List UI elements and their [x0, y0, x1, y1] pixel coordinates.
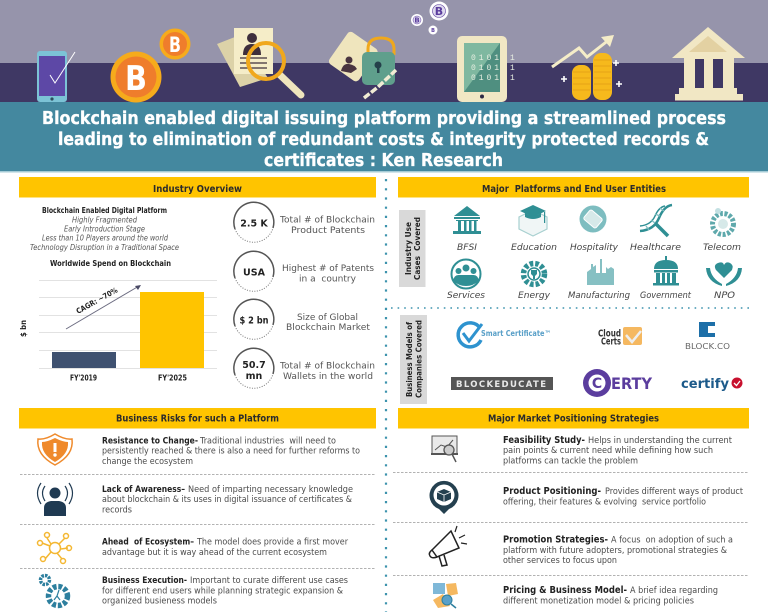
bar chart: worldwide spend: FY'2025 [158, 374, 187, 382]
icon: warning shield [38, 434, 72, 465]
strategy: pricing and business model: Pricing & Business Model- [503, 585, 627, 596]
stat: country: Highest # of Patents [282, 264, 374, 274]
icon: services [452, 260, 480, 288]
label: education: Education [511, 243, 557, 253]
panel: industry overview [19, 177, 376, 388]
icon: network hub [38, 532, 72, 564]
side label: business models: Companies Covered [414, 320, 424, 398]
heading: major platforms [398, 177, 749, 198]
icon: tablet with binary digits: 1 [510, 74, 515, 83]
text block: platform characteristics: Blockchain Enabled Digital Platform [42, 206, 167, 215]
risk: ahead of ecosystem: Ahead of Ecosystem– [102, 538, 194, 548]
strategy: product positioning [503, 486, 744, 508]
strategy: feasibility study: Helps in understanding the current [588, 436, 733, 446]
stat: wallets: Total # of Blockchain [279, 362, 375, 372]
bar chart: worldwide spend [19, 259, 217, 382]
icon: tablet with binary digits: 0101 [471, 64, 499, 73]
heading: business risks [19, 408, 376, 428]
label: manufacturing: Manufacturing [568, 291, 630, 301]
header banner [0, 0, 768, 172]
icon: tablet with binary digits: 0101 [471, 54, 499, 63]
stat: country: in a country [299, 274, 357, 284]
side label: industry use cases: Cases Covered [413, 217, 422, 280]
logo: Blockeducate: BLOCKEDUCATE [456, 380, 546, 390]
label: BFSI: BFSI [457, 243, 477, 253]
label: healthcare: Healthcare [630, 243, 681, 253]
label: energy: Energy [518, 291, 551, 301]
icon: id card, lock and chain [327, 30, 396, 98]
side label: business models: Business Models of [405, 322, 414, 397]
icon: megaphone [429, 526, 467, 566]
side label: business models [400, 315, 427, 404]
icon: energy [524, 264, 544, 284]
risk: business execution: Important to curate different use cases [190, 576, 349, 586]
icon: gears with runner [40, 576, 68, 606]
panel: business risks [19, 408, 376, 606]
icon: bitcoin large: B [125, 59, 147, 99]
logo: Blockeducate [451, 377, 553, 390]
logo: Cloud Certs: Certs [601, 336, 621, 348]
logo: Cloud Certs: Cloud [598, 328, 621, 340]
side label: industry use cases: Industry Use [404, 221, 413, 275]
icon: bitcoin small: B [169, 33, 181, 57]
icon: tablet with binary digits: 1 [510, 64, 515, 73]
strategy: promotion strategies: other services to focus upon [503, 556, 617, 566]
heading: business risks: Business Risks for such a Platform [116, 414, 279, 424]
risk: lack of awareness: Need of imparting necessary knowledge [188, 485, 353, 495]
stat: wallets: Wallets in the world [283, 372, 373, 382]
strategy: product positioning: Provides different ways of product [605, 487, 744, 497]
icon: product pin [430, 481, 458, 514]
icon: healthcare DNA [640, 205, 672, 236]
logo: Block.co [685, 322, 730, 351]
risk: resistance to change: Resistance to Change- [102, 436, 198, 446]
stat: patents: Total # of Blockchain [279, 216, 375, 226]
icon: manufacturing [587, 259, 614, 285]
risk: business execution: Business Execution- [102, 576, 187, 586]
strategy: feasibility study: platforms can tackle the problem [503, 456, 638, 466]
icon: NPO heart and hands [706, 262, 742, 286]
icon: awareness person [38, 483, 72, 516]
risk: business execution [102, 576, 349, 606]
risk: resistance to change [102, 436, 360, 467]
icon: small blockchain coins: B [431, 28, 435, 34]
icon: tablet with binary digits [457, 36, 515, 102]
divider: dotted [386, 179, 750, 612]
icon: government [653, 256, 679, 286]
stat: patents: Product Patents [291, 226, 365, 236]
stat: patents [234, 202, 375, 242]
icon: bitcoin small [160, 28, 190, 60]
title [42, 109, 726, 171]
heading: major platforms: Major Platforms and End User Entities [482, 184, 666, 195]
label: hospitality: Hospitality [570, 243, 619, 253]
strategy: promotion strategies [503, 534, 733, 566]
risk: lack of awareness: Lack of Awareness– [102, 485, 185, 495]
strategy: feasibility study: Feasibility Study- [503, 435, 585, 446]
logo: Cloud Certs [598, 327, 642, 348]
icon: phone with check [37, 51, 75, 102]
stat: market size: Blockchain Market [286, 323, 370, 333]
stat: wallets: 50.7 [242, 360, 266, 371]
strategy: promotion strategies: A focus on adoption of such a [611, 536, 733, 546]
stat: wallets: mn [246, 371, 263, 382]
heading: industry overview [19, 177, 376, 198]
risk: resistance to change: Traditional industries will need to [199, 436, 336, 446]
icon: small blockchain coins [411, 2, 448, 34]
icon: small blockchain coins: B [435, 5, 443, 18]
risk: lack of awareness: about blockchain & its uses in digital issuance of certificates & [102, 495, 352, 505]
logo: Certy: ERTY [611, 374, 652, 393]
logo: Block.co: BLOCK.CO [685, 342, 730, 351]
risk: resistance to change: persistently reached & there is also a need for further reforms to [102, 446, 360, 456]
side label: industry use cases [399, 210, 426, 287]
icon: tablet with binary digits: 1 [510, 54, 515, 63]
label: telecom: Telecom [703, 243, 741, 253]
icon: feasibility monitor [431, 436, 458, 462]
bar chart: worldwide spend: CAGR: ~70% [75, 285, 120, 316]
heading: industry overview: Industry Overview [153, 184, 242, 195]
icon: documents under magnifier [217, 28, 301, 95]
text block: platform characteristics: Highly Fragmented [72, 216, 137, 224]
icon: bitcoin large [110, 52, 162, 102]
stat: market size: Size of Global [297, 313, 358, 323]
icon: telecom [712, 208, 734, 234]
strategy: pricing and business model: different monetization model & pricing policies [503, 596, 695, 606]
bar chart: worldwide spend: Worldwide Spend on Blockchain [50, 259, 171, 268]
risk: lack of awareness [102, 485, 353, 516]
heading: positioning strategies: Major Market Positioning Strategies [488, 414, 659, 424]
stat: market size [234, 299, 370, 339]
label: NPO: NPO [714, 291, 735, 301]
strategy: product positioning: Product Positioning- [503, 486, 601, 497]
text block: platform characteristics: Technology Disruption in a Traditional Space [30, 243, 179, 252]
strategy: feasibility study [503, 435, 733, 466]
logo: Certy [583, 369, 652, 397]
strategy: pricing and business model: A brief idea regarding [630, 586, 718, 596]
text block: platform characteristics [30, 206, 179, 252]
text block: platform characteristics: Early Introduction Stage [64, 224, 145, 234]
title: leading to elimination of redundant costs & integrity protected records & [58, 130, 709, 150]
icon: bank building [672, 27, 745, 100]
logo: Smart Certificate: Smart Certificate™ [481, 329, 551, 338]
risk: lack of awareness: records [102, 506, 133, 516]
panel: platforms and end users [398, 177, 749, 404]
strategy: feasibility study: pain points & current need while defining how such [503, 446, 713, 456]
bar chart: worldwide spend: FY'2019 [70, 374, 97, 382]
logo: Certy: C [592, 376, 602, 392]
icon: education [519, 205, 547, 236]
stat: patents: 2.5 K [240, 218, 268, 230]
icon: tablet with binary digits: 0101 [471, 74, 499, 83]
icon: small blockchain coins: B [414, 16, 420, 24]
strategy: promotion strategies: platform with future adopters, promotional strategies & [503, 546, 727, 556]
heading: positioning strategies [398, 408, 749, 428]
icon: BFSI [453, 206, 481, 234]
icon: hospitality [580, 206, 606, 232]
stat: country: USA [243, 268, 266, 278]
label: services: Services [447, 291, 485, 301]
bar chart: worldwide spend: $ bn [19, 320, 28, 337]
panel: market positioning strategies [393, 408, 749, 608]
title: certificates : Ken Research [264, 151, 503, 171]
label: government: Government [640, 291, 691, 301]
stat: wallets [234, 348, 375, 388]
strategy: product positioning: offering, their features & evolving service portfolio [503, 498, 706, 508]
strategy: pricing and business model [503, 585, 718, 606]
icon: pricing [433, 583, 458, 608]
risk: ahead of ecosystem [102, 538, 348, 558]
text block: platform characteristics: Less than 10 Players around the world [42, 234, 168, 243]
risk: business execution: organized busieness models [102, 596, 218, 606]
stat: country [234, 251, 374, 291]
risk: resistance to change: change the ecosystem [102, 457, 193, 467]
risk: ahead of ecosystem: advantage but it is way ahead of the current ecosystem [102, 548, 327, 558]
strategy: promotion strategies: Promotion Strategies- [503, 534, 608, 546]
icon: rising arrow and coin stacks [552, 35, 622, 100]
logo: certify: certify [681, 377, 730, 392]
stat: market size: $ 2 bn [240, 316, 269, 326]
logo: Smart Certificate [458, 323, 551, 347]
risk: ahead of ecosystem: The model does provide a first mover [196, 538, 348, 548]
risk: business execution: for different end users while planning strategic expansion & [102, 586, 343, 596]
